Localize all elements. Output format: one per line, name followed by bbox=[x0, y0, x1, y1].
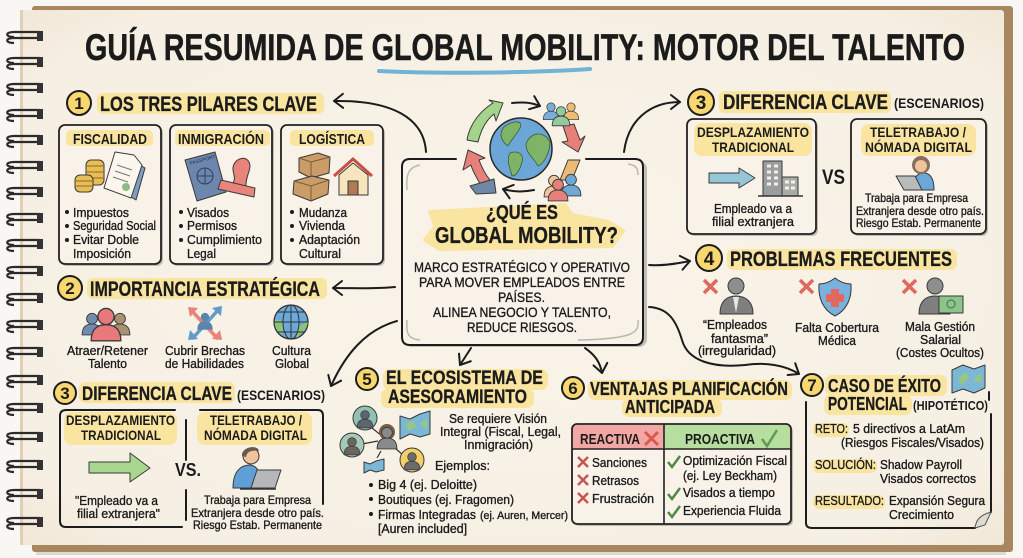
list: inmigracion: Visados bbox=[187, 205, 229, 220]
heading 1 bbox=[67, 91, 324, 116]
reto: 5 directivos a LatAm bbox=[853, 421, 965, 436]
panel: fiscalidad: FISCALIDAD bbox=[73, 131, 147, 148]
problem: mala gestion salarial: Mala Gestión bbox=[905, 319, 975, 334]
panel: logistica bbox=[281, 125, 385, 266]
problem: mala gestion salarial: Salarial bbox=[920, 332, 961, 347]
list: fiscalidad: Impuestos bbox=[73, 205, 129, 220]
heading 6 bbox=[562, 377, 792, 417]
problem: falta cobertura medica: Falta Cobertura bbox=[795, 320, 880, 335]
section 1: los tres pilares bbox=[59, 91, 385, 266]
panel: inmigracion: INMIGRACIÓN bbox=[178, 130, 264, 148]
heading 3 right bbox=[688, 89, 984, 115]
icon: advisor network bbox=[340, 406, 430, 473]
panel: desplazamiento tradicional bbox=[687, 119, 818, 236]
body text: PARA MOVER EMPLEADOS ENTRE bbox=[419, 274, 625, 290]
heading 5: 5 bbox=[362, 370, 372, 389]
heading 1: LOS TRES PILARES CLAVE bbox=[100, 93, 317, 116]
text: vision integral: Inmigración) bbox=[464, 437, 533, 452]
panel: teletrabajo: TELETRABAJO / bbox=[870, 124, 966, 140]
list: ejemplos: Firmas Integradas bbox=[378, 507, 476, 522]
spiral binding bbox=[7, 31, 43, 529]
column: reactiva bbox=[578, 431, 658, 506]
versus: VS. bbox=[175, 460, 201, 480]
list: logistica: Cultural bbox=[299, 246, 341, 261]
list: fiscalidad: Evitar Doble bbox=[73, 232, 139, 247]
desplazamiento tradicional: filial extranjera" bbox=[77, 506, 160, 521]
panel: desplazamiento tradicional: TRADICIONAL bbox=[712, 139, 794, 155]
teletrabajo: TELETRABAJO / bbox=[210, 412, 302, 428]
problem: falta cobertura medica: Médica bbox=[818, 333, 857, 348]
heading: ¿QUÉ ES bbox=[486, 201, 558, 224]
column: proactiva: Experiencia Fluida bbox=[683, 503, 782, 518]
column: proactiva: Visados a tiempo bbox=[683, 485, 775, 500]
heading 5 bbox=[356, 368, 548, 408]
solucion: Visados correctos bbox=[880, 471, 976, 486]
teletrabajo bbox=[191, 412, 324, 532]
panel: fiscalidad bbox=[59, 125, 163, 266]
desplazamiento tradicional bbox=[64, 412, 177, 521]
panel: inmigracion bbox=[170, 125, 274, 266]
list: ejemplos bbox=[369, 477, 568, 536]
panel frame bbox=[60, 410, 323, 527]
text: vision integral bbox=[435, 411, 561, 473]
icon: coins and document bbox=[75, 152, 145, 200]
heading 4: PROBLEMAS FRECUENTES bbox=[730, 248, 952, 271]
captions: Atraer/Retener bbox=[67, 343, 149, 358]
column: reactiva: Sanciones bbox=[592, 455, 647, 470]
heading 7 bbox=[801, 374, 988, 415]
panel: logistica: LOGÍSTICA bbox=[299, 131, 365, 148]
desplazamiento tradicional: "Empleado va a bbox=[75, 493, 159, 508]
captions: de Habilidades bbox=[165, 356, 244, 371]
icon: globe bbox=[274, 305, 308, 339]
icon: passport and stamp bbox=[185, 152, 255, 201]
table: reactiva vs proactiva bbox=[572, 424, 793, 526]
list: ejemplos: (ej. Auren, Mercer) bbox=[480, 510, 568, 522]
panel: desplazamiento tradicional: DESPLAZAMIENTO bbox=[697, 124, 809, 140]
column: proactiva bbox=[668, 430, 787, 518]
problem: falta cobertura medica bbox=[795, 278, 880, 348]
problem: empleados fantasma: fantasma” bbox=[711, 331, 768, 346]
heading 2 bbox=[58, 276, 327, 301]
heading 2: 2 bbox=[65, 279, 75, 298]
list: inmigracion bbox=[179, 205, 262, 261]
list: fiscalidad: Seguridad Social bbox=[73, 218, 156, 233]
reto: RETO: bbox=[815, 421, 848, 436]
resultado: RESULTADO: bbox=[815, 493, 884, 508]
heading 5: ASESORAMIENTO bbox=[388, 387, 527, 408]
body text: REDUCE RIESGOS. bbox=[467, 319, 577, 335]
heading 3 left: 3 bbox=[60, 384, 70, 403]
list: inmigracion: Legal bbox=[187, 246, 216, 261]
column: reactiva: REACTIVA bbox=[580, 431, 640, 448]
section 3 right: diferencia clave bbox=[687, 89, 988, 236]
solucion bbox=[813, 457, 976, 486]
resultado: Expansión Segura bbox=[889, 493, 986, 508]
list: inmigracion: Permisos bbox=[187, 218, 237, 233]
icon: map bbox=[952, 365, 985, 393]
section 5: ecosistema de asesoramiento bbox=[340, 368, 568, 536]
panel: desplazamiento tradicional: Empleado va a bbox=[714, 201, 793, 216]
column: proactiva: (ej. Ley Beckham) bbox=[683, 468, 777, 483]
arrows from the centre box bbox=[331, 101, 799, 386]
icon: person with laptop bbox=[233, 447, 281, 489]
box frame bbox=[404, 161, 647, 347]
heading 3 left bbox=[54, 382, 325, 405]
heading 7: CASO DE ÉXITO bbox=[828, 375, 941, 396]
problem: empleados fantasma: “Empleados bbox=[703, 317, 767, 332]
text: vision integral: Integral (Fiscal, Legal, bbox=[440, 424, 561, 439]
resultado: Crecimiento bbox=[889, 507, 954, 522]
body text: PAÍSES. bbox=[498, 289, 545, 305]
solucion: SOLUCIÓN: bbox=[815, 457, 876, 472]
heading 7: 7 bbox=[807, 376, 817, 395]
solucion: Shadow Payroll bbox=[880, 457, 962, 472]
teletrabajo: Riesgo Estab. Permanente bbox=[193, 518, 322, 532]
panel: teletrabajo bbox=[851, 119, 988, 236]
column: proactiva: Optimización Fiscal bbox=[683, 453, 787, 468]
icon: people bbox=[82, 308, 130, 341]
desplazamiento tradicional: DESPLAZAMIENTO bbox=[66, 412, 175, 428]
panel frame bbox=[806, 392, 991, 528]
heading 3 left: DIFERENCIA CLAVE bbox=[82, 384, 232, 405]
captions: Talento bbox=[88, 356, 127, 371]
panel: teletrabajo: NÓMADA DIGITAL bbox=[865, 138, 972, 155]
icon: woman with laptop bbox=[896, 156, 934, 190]
heading 4: 4 bbox=[704, 249, 715, 270]
body text: MARCO ESTRATÉGICO Y OPERATIVO bbox=[414, 259, 630, 275]
heading 7: (HIPOTÉTICO) bbox=[913, 398, 988, 413]
list: logistica: Mudanza bbox=[299, 205, 348, 220]
section 3 left: diferencia clave bbox=[54, 382, 325, 532]
reto: (Riesgos Fiscales/Visados) bbox=[841, 435, 984, 450]
problem: mala gestion salarial: (Costes Ocultos) bbox=[896, 345, 984, 360]
panel: teletrabajo: Extranjera desde otro país. bbox=[856, 204, 984, 218]
column: proactiva: PROACTIVA bbox=[685, 431, 755, 448]
section 6: ventajas planificacion anticipada bbox=[562, 377, 793, 526]
list: ejemplos: [Auren included] bbox=[378, 521, 467, 536]
list: inmigracion: Cumplimiento bbox=[187, 232, 262, 247]
text: vision integral: Ejemplos: bbox=[435, 458, 490, 473]
captions: Cubrir Brechas bbox=[165, 343, 245, 358]
captions: Global bbox=[275, 356, 309, 371]
heading 6: VENTAJAS PLANIFICACIÓN bbox=[590, 378, 788, 399]
icon: passport and stamp: PASSPORT bbox=[189, 154, 216, 167]
heading: GLOBAL MOBILITY? bbox=[435, 222, 618, 248]
icon: arrow and building bbox=[709, 161, 803, 196]
column: reactiva: Frustración bbox=[592, 491, 654, 506]
list: logistica: Vivienda bbox=[299, 218, 346, 233]
heading 5: EL ECOSISTEMA DE bbox=[386, 368, 543, 389]
section 2: importancia estrategica bbox=[58, 276, 327, 371]
list: fiscalidad: Imposición bbox=[73, 246, 131, 261]
captions bbox=[67, 343, 312, 371]
panel: que es global mobility bbox=[402, 100, 647, 347]
heading 3 left: (ESCENARIOS) bbox=[237, 387, 325, 403]
list: logistica: Adaptación bbox=[299, 232, 360, 247]
body text: ALINEA NEGOCIO Y TALENTO, bbox=[433, 304, 611, 320]
teletrabajo: NÓMADA DIGITAL bbox=[204, 426, 307, 443]
panel: teletrabajo: Riesgo Estab. Permanente bbox=[856, 216, 981, 230]
list: logistica bbox=[290, 205, 360, 261]
teletrabajo: Trabaja para Empresa bbox=[204, 493, 311, 507]
heading 6: 6 bbox=[568, 379, 578, 398]
heading 6: ANTICIPADA bbox=[625, 397, 715, 417]
panel: teletrabajo: Trabaja para Empresa bbox=[865, 191, 968, 205]
list: fiscalidad bbox=[65, 205, 156, 261]
problem: empleados fantasma: (irregularidad) bbox=[698, 343, 776, 358]
icon: boxes and house bbox=[293, 153, 372, 201]
heading 3 right: (ESCENARIOS) bbox=[894, 95, 984, 111]
heading 4 bbox=[696, 245, 957, 271]
column: reactiva: Retrasos bbox=[592, 473, 639, 488]
reto bbox=[813, 421, 984, 450]
body text bbox=[414, 259, 630, 335]
heading 3 right: DIFERENCIA CLAVE bbox=[723, 91, 888, 114]
problem: empleados fantasma bbox=[698, 278, 776, 358]
heading 2: IMPORTANCIA ESTRATÉGICA bbox=[90, 278, 320, 301]
icon: globe with flow cycle bbox=[463, 100, 585, 201]
text: vision integral: Se requiere Visión bbox=[449, 411, 547, 426]
captions: Cultura bbox=[272, 343, 312, 358]
problem: mala gestion salarial bbox=[896, 278, 984, 360]
section 7: caso de exito bbox=[801, 365, 991, 528]
heading bbox=[425, 201, 623, 249]
list: ejemplos: Big 4 (ej. Deloitte) bbox=[378, 477, 477, 492]
list: ejemplos: Boutiques (ej. Fragomen) bbox=[378, 492, 514, 507]
resultado bbox=[813, 493, 986, 522]
section 4: problemas frecuentes bbox=[696, 245, 984, 360]
heading 7: POTENCIAL bbox=[828, 394, 907, 414]
icon: green arrow bbox=[89, 453, 150, 482]
heading 3 right: 3 bbox=[696, 93, 706, 114]
desplazamiento tradicional: TRADICIONAL bbox=[81, 427, 161, 443]
heading 1: 1 bbox=[74, 94, 84, 113]
teletrabajo: Extranjera desde otro país. bbox=[191, 506, 324, 520]
versus: VS bbox=[822, 166, 845, 189]
panel: desplazamiento tradicional: filial extranjera bbox=[712, 214, 795, 229]
icon: crossing arrows bbox=[188, 306, 222, 340]
